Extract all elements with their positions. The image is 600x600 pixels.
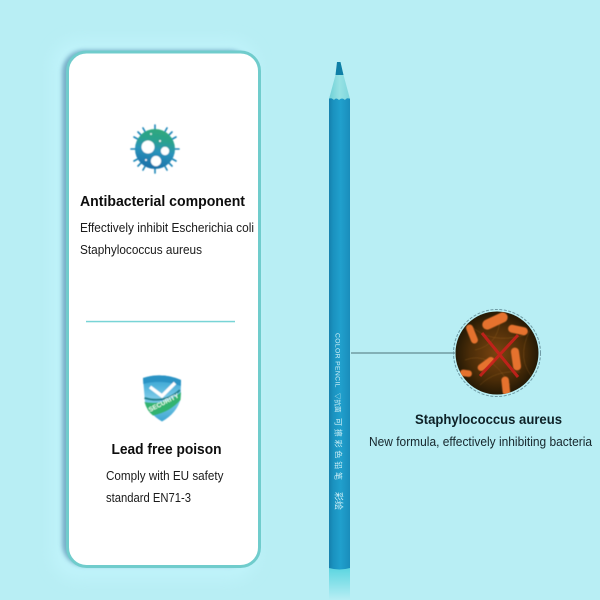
text: lead free description: standard EN71-3 bbox=[106, 491, 191, 505]
pencil label text bbox=[334, 333, 344, 510]
text: antibacterial description bbox=[80, 221, 254, 257]
icon: virus bbox=[131, 125, 179, 173]
pencil label text: 彩绘 bbox=[334, 492, 344, 510]
text: lead free description bbox=[106, 469, 224, 505]
text: antibacterial description: Staphylococcus aureus bbox=[80, 243, 202, 257]
pencil label text: COLOR PENCIL bbox=[334, 333, 340, 388]
text: new formula: New formula, effectively inhibiting bacteria bbox=[369, 435, 592, 449]
icon: security shield bbox=[143, 375, 181, 422]
pencil bbox=[329, 62, 350, 600]
icon: bacteria circle with cross bbox=[454, 310, 540, 396]
heading: staphylococcus aureus: Staphylococcus aureus bbox=[415, 411, 562, 427]
text: antibacterial description: Effectively inhibit Escherichia coli bbox=[80, 221, 254, 235]
heading: lead free poison: Lead free poison bbox=[112, 441, 222, 458]
text: lead free description: Comply with EU safety bbox=[106, 469, 224, 483]
heading: antibacterial component: Antibacterial component bbox=[80, 193, 245, 210]
pencil label text: ▽抗菌 bbox=[334, 393, 342, 413]
icon: security shield: SECURITY bbox=[148, 392, 181, 414]
callout line bbox=[351, 352, 455, 354]
pencil label text: 可擦彩色铅笔 bbox=[334, 418, 344, 483]
panel: features card bbox=[52, 40, 260, 580]
